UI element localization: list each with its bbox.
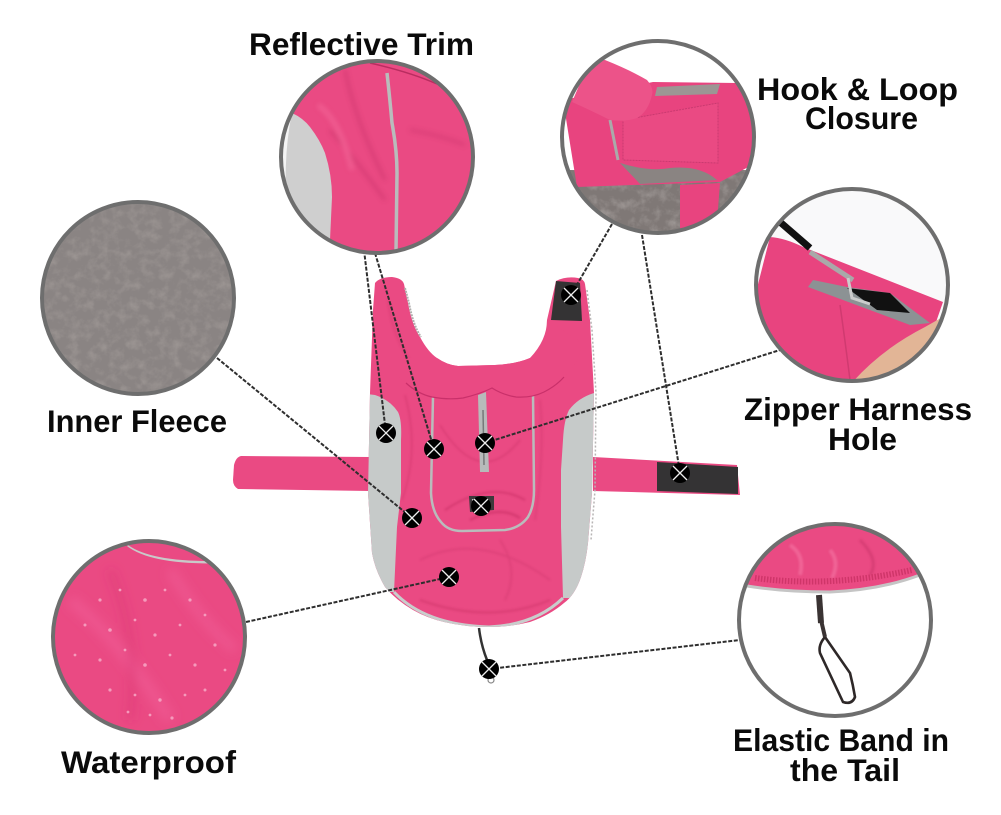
heading: elastic band in the tail: Elastic Band in [733, 722, 949, 758]
elastic tail cord [479, 628, 487, 660]
heading: hook and loop closure [757, 71, 958, 136]
callout line: strap closure [642, 235, 680, 473]
callout line: waterproof [246, 577, 449, 622]
detail circle: inner fleece [40, 200, 237, 397]
collar flap [382, 320, 580, 399]
heading: zipper harness hole: Hole [828, 421, 897, 457]
marker: strap closure [670, 463, 690, 483]
marker: waterproof [439, 567, 459, 587]
marker: side panel [376, 423, 396, 443]
fleece edge left [405, 288, 421, 337]
callout line: elastic band [489, 640, 740, 669]
heading: hook and loop closure: Closure [805, 100, 918, 136]
heading: reflective trim: Reflective Trim [249, 26, 474, 62]
marker: pocket [471, 496, 491, 516]
heading: elastic band in the tail [733, 722, 949, 788]
chest reflective trim [431, 394, 534, 531]
coat strap: left [233, 456, 370, 491]
detail circle: waterproof [50, 538, 248, 736]
callout line: reflective trim to chest [375, 253, 434, 449]
callout line: fleece [217, 358, 412, 518]
zipper line [483, 410, 484, 465]
coat grey side panel left [368, 394, 402, 592]
detail circle: reflective trim [270, 60, 475, 255]
detail circle: zipper harness hole [754, 187, 955, 385]
marker: elastic [479, 659, 499, 679]
detail circle: hook and loop closure [560, 38, 760, 238]
tail cord ring [488, 677, 494, 683]
heading: elastic band in the tail: the Tail [790, 752, 900, 788]
callout line: shoulder closure [571, 224, 612, 295]
heading: inner fleece: Inner Fleece [47, 403, 227, 439]
coat grey side panel right [561, 393, 594, 598]
marker dots [376, 285, 690, 679]
heading: zipper harness hole: Zipper Harness [744, 391, 972, 427]
callout line: zipper [485, 350, 780, 443]
zipper harness hole [478, 392, 489, 472]
coat strap: right with hook and loop patch [593, 457, 740, 495]
marker: zipper [475, 433, 495, 453]
pocket tab [469, 496, 494, 512]
water droplets [74, 589, 226, 720]
bottom reflective hem [394, 592, 563, 627]
marker: shoulder closure [561, 285, 581, 305]
heading: waterproof: Waterproof [61, 744, 237, 780]
heading: hook and loop closure: Hook & Loop [757, 71, 958, 107]
fleece edge right [587, 290, 596, 540]
marker: chest trim [424, 439, 444, 459]
hook and loop patch on shoulder [551, 281, 582, 321]
callout line: reflective trim to side [364, 250, 386, 433]
marker: fleece [402, 508, 422, 528]
collar shading [406, 377, 564, 399]
heading: zipper harness hole [744, 391, 972, 457]
coat fabric shading [420, 491, 549, 614]
dog coat [360, 277, 600, 660]
detail circle: elastic band [736, 520, 934, 720]
